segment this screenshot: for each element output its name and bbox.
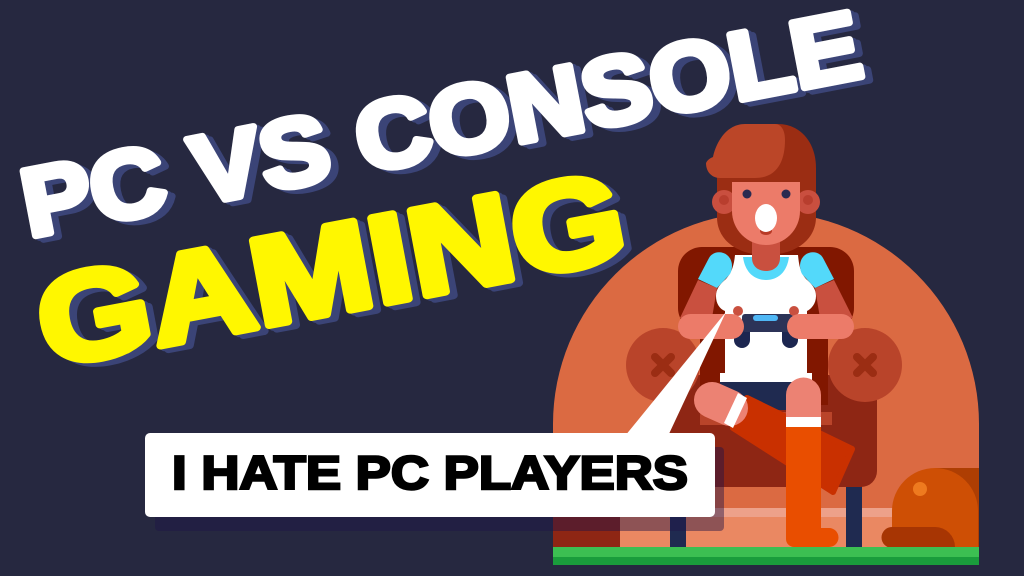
title: GAMING: GAMING <box>26 147 636 394</box>
grass strip <box>553 547 979 565</box>
title: GAMING: GAMING <box>30 148 640 395</box>
controller <box>734 314 798 348</box>
open mouth <box>755 204 777 232</box>
head <box>706 124 820 245</box>
torso in white shirt <box>716 255 816 382</box>
eyes <box>742 190 790 198</box>
sofa body <box>660 375 877 487</box>
dark block at lower left <box>553 495 620 548</box>
title: PC VS CONSOLE: PC VS CONSOLE <box>13 0 870 258</box>
right armrest <box>828 328 902 402</box>
crossed leg <box>712 393 852 492</box>
sofa back <box>678 247 854 405</box>
upper arms <box>680 280 853 318</box>
forearms and hands <box>678 306 854 339</box>
hat on the floor <box>882 468 979 548</box>
neck <box>752 235 780 271</box>
face <box>732 182 800 245</box>
bubble box <box>145 433 715 517</box>
left armrest <box>626 328 700 402</box>
title: PC VS CONSOLE: PC VS CONSOLE <box>21 0 877 261</box>
shorts <box>720 382 802 410</box>
back hair <box>717 124 816 255</box>
bubble text: I HATE PC PLAYERS <box>172 446 688 499</box>
lip <box>760 227 772 235</box>
sofa legs <box>670 480 862 548</box>
hair fringe <box>706 124 785 178</box>
sleeves <box>698 252 834 288</box>
title: PC VS CONSOLE: PC VS CONSOLE <box>17 0 874 259</box>
speech bubble shadow <box>155 447 724 531</box>
collar <box>743 257 789 280</box>
ears <box>712 190 820 214</box>
arch backdrop <box>553 212 979 548</box>
speech bubble <box>145 312 726 517</box>
floor <box>553 508 979 548</box>
illustration: gamer on sofa <box>553 124 979 548</box>
bubble pointer <box>625 312 726 436</box>
sofa seat edge <box>700 412 832 425</box>
title: GAMING: GAMING <box>34 150 643 397</box>
standing leg <box>786 378 838 547</box>
